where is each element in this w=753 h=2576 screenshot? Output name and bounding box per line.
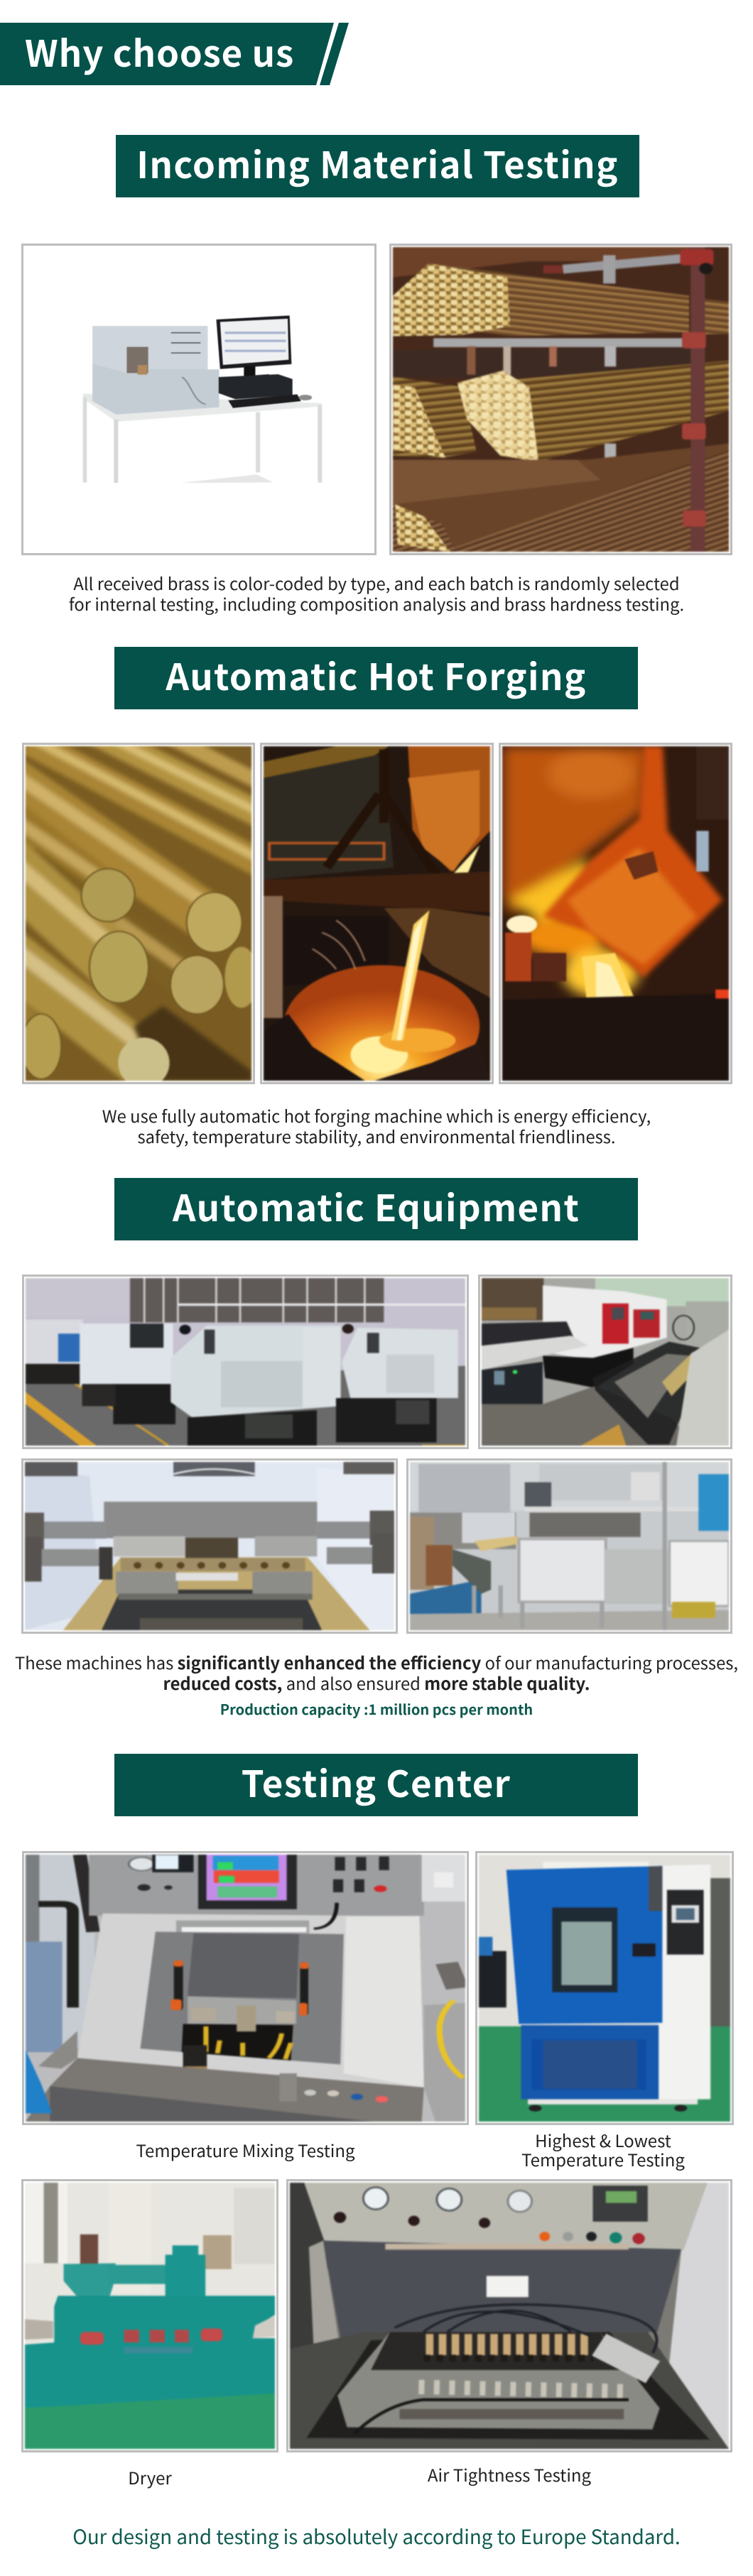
label: highest and lowest temperature testing	[521, 2127, 685, 2171]
heading: Incoming Material Testing: Incoming Material Testing	[136, 136, 619, 189]
label: highest and lowest temperature testing: Highest & Lowest	[535, 2127, 671, 2152]
caption: hot forging	[102, 1103, 651, 1147]
photo: brass bars	[22, 743, 255, 1084]
closing statement: Our design and testing is absolutely according to Europe Standard.	[72, 2521, 681, 2550]
photo: CNC machines row	[22, 1275, 469, 1449]
header banner: Why choose us: Why choose us	[25, 25, 294, 77]
photo: dryer	[21, 2179, 278, 2452]
label: dryer: Dryer	[128, 2465, 172, 2489]
photo: high and low temperature chamber	[475, 1851, 734, 2125]
photo: automated assembly line	[406, 1458, 732, 1634]
heading: Automatic Equipment	[114, 1178, 638, 1240]
photo: ladle pouring	[499, 743, 732, 1084]
photo: machining fixture closeup	[21, 1458, 398, 1634]
production capacity note: Production capacity :1 million pcs per month	[220, 1698, 533, 1719]
caption: incoming material: for internal testing, including composition analysis and brass hardness testing.	[69, 591, 684, 615]
caption: hot forging: safety, temperature stability, and environmental friendliness.	[137, 1123, 616, 1147]
photo: pouring molten metal	[260, 743, 494, 1084]
photo: air tightness test bench	[286, 2179, 732, 2452]
heading: Automatic Hot Forging: Automatic Hot Forging	[166, 648, 587, 701]
caption: machines	[15, 1649, 738, 1694]
header banner: Why choose us	[0, 23, 349, 85]
heading: Automatic Equipment: Automatic Equipment	[173, 1179, 580, 1232]
caption: incoming material: All received brass is color-coded by type, and each batch is randomly selected	[73, 570, 680, 595]
photo: bar feeder lathe	[478, 1275, 732, 1449]
label: highest and lowest temperature testing: Temperature Testing	[521, 2146, 685, 2171]
heading: Testing Center	[114, 1754, 638, 1816]
caption: machines: reduced costs, and also ensured more stable quality.	[163, 1670, 590, 1694]
label: temperature mixing testing: Temperature Mixing Testing	[136, 2137, 355, 2162]
photo: brass rods on racks	[389, 244, 732, 555]
caption: incoming material	[69, 570, 684, 615]
caption: machines: These machines has significantly enhanced the efficiency of our manufacturing processes,	[15, 1649, 738, 1674]
label: air tightness testing: Air Tightness Testing	[428, 2462, 591, 2487]
caption: hot forging: We use fully automatic hot forging machine which is energy efficiency,	[102, 1103, 651, 1128]
heading: Testing Center: Testing Center	[242, 1755, 511, 1808]
photo: spectrometer on table	[21, 244, 376, 555]
photo: temperature mixing test bench	[22, 1851, 469, 2125]
heading: Automatic Hot Forging	[114, 647, 638, 709]
